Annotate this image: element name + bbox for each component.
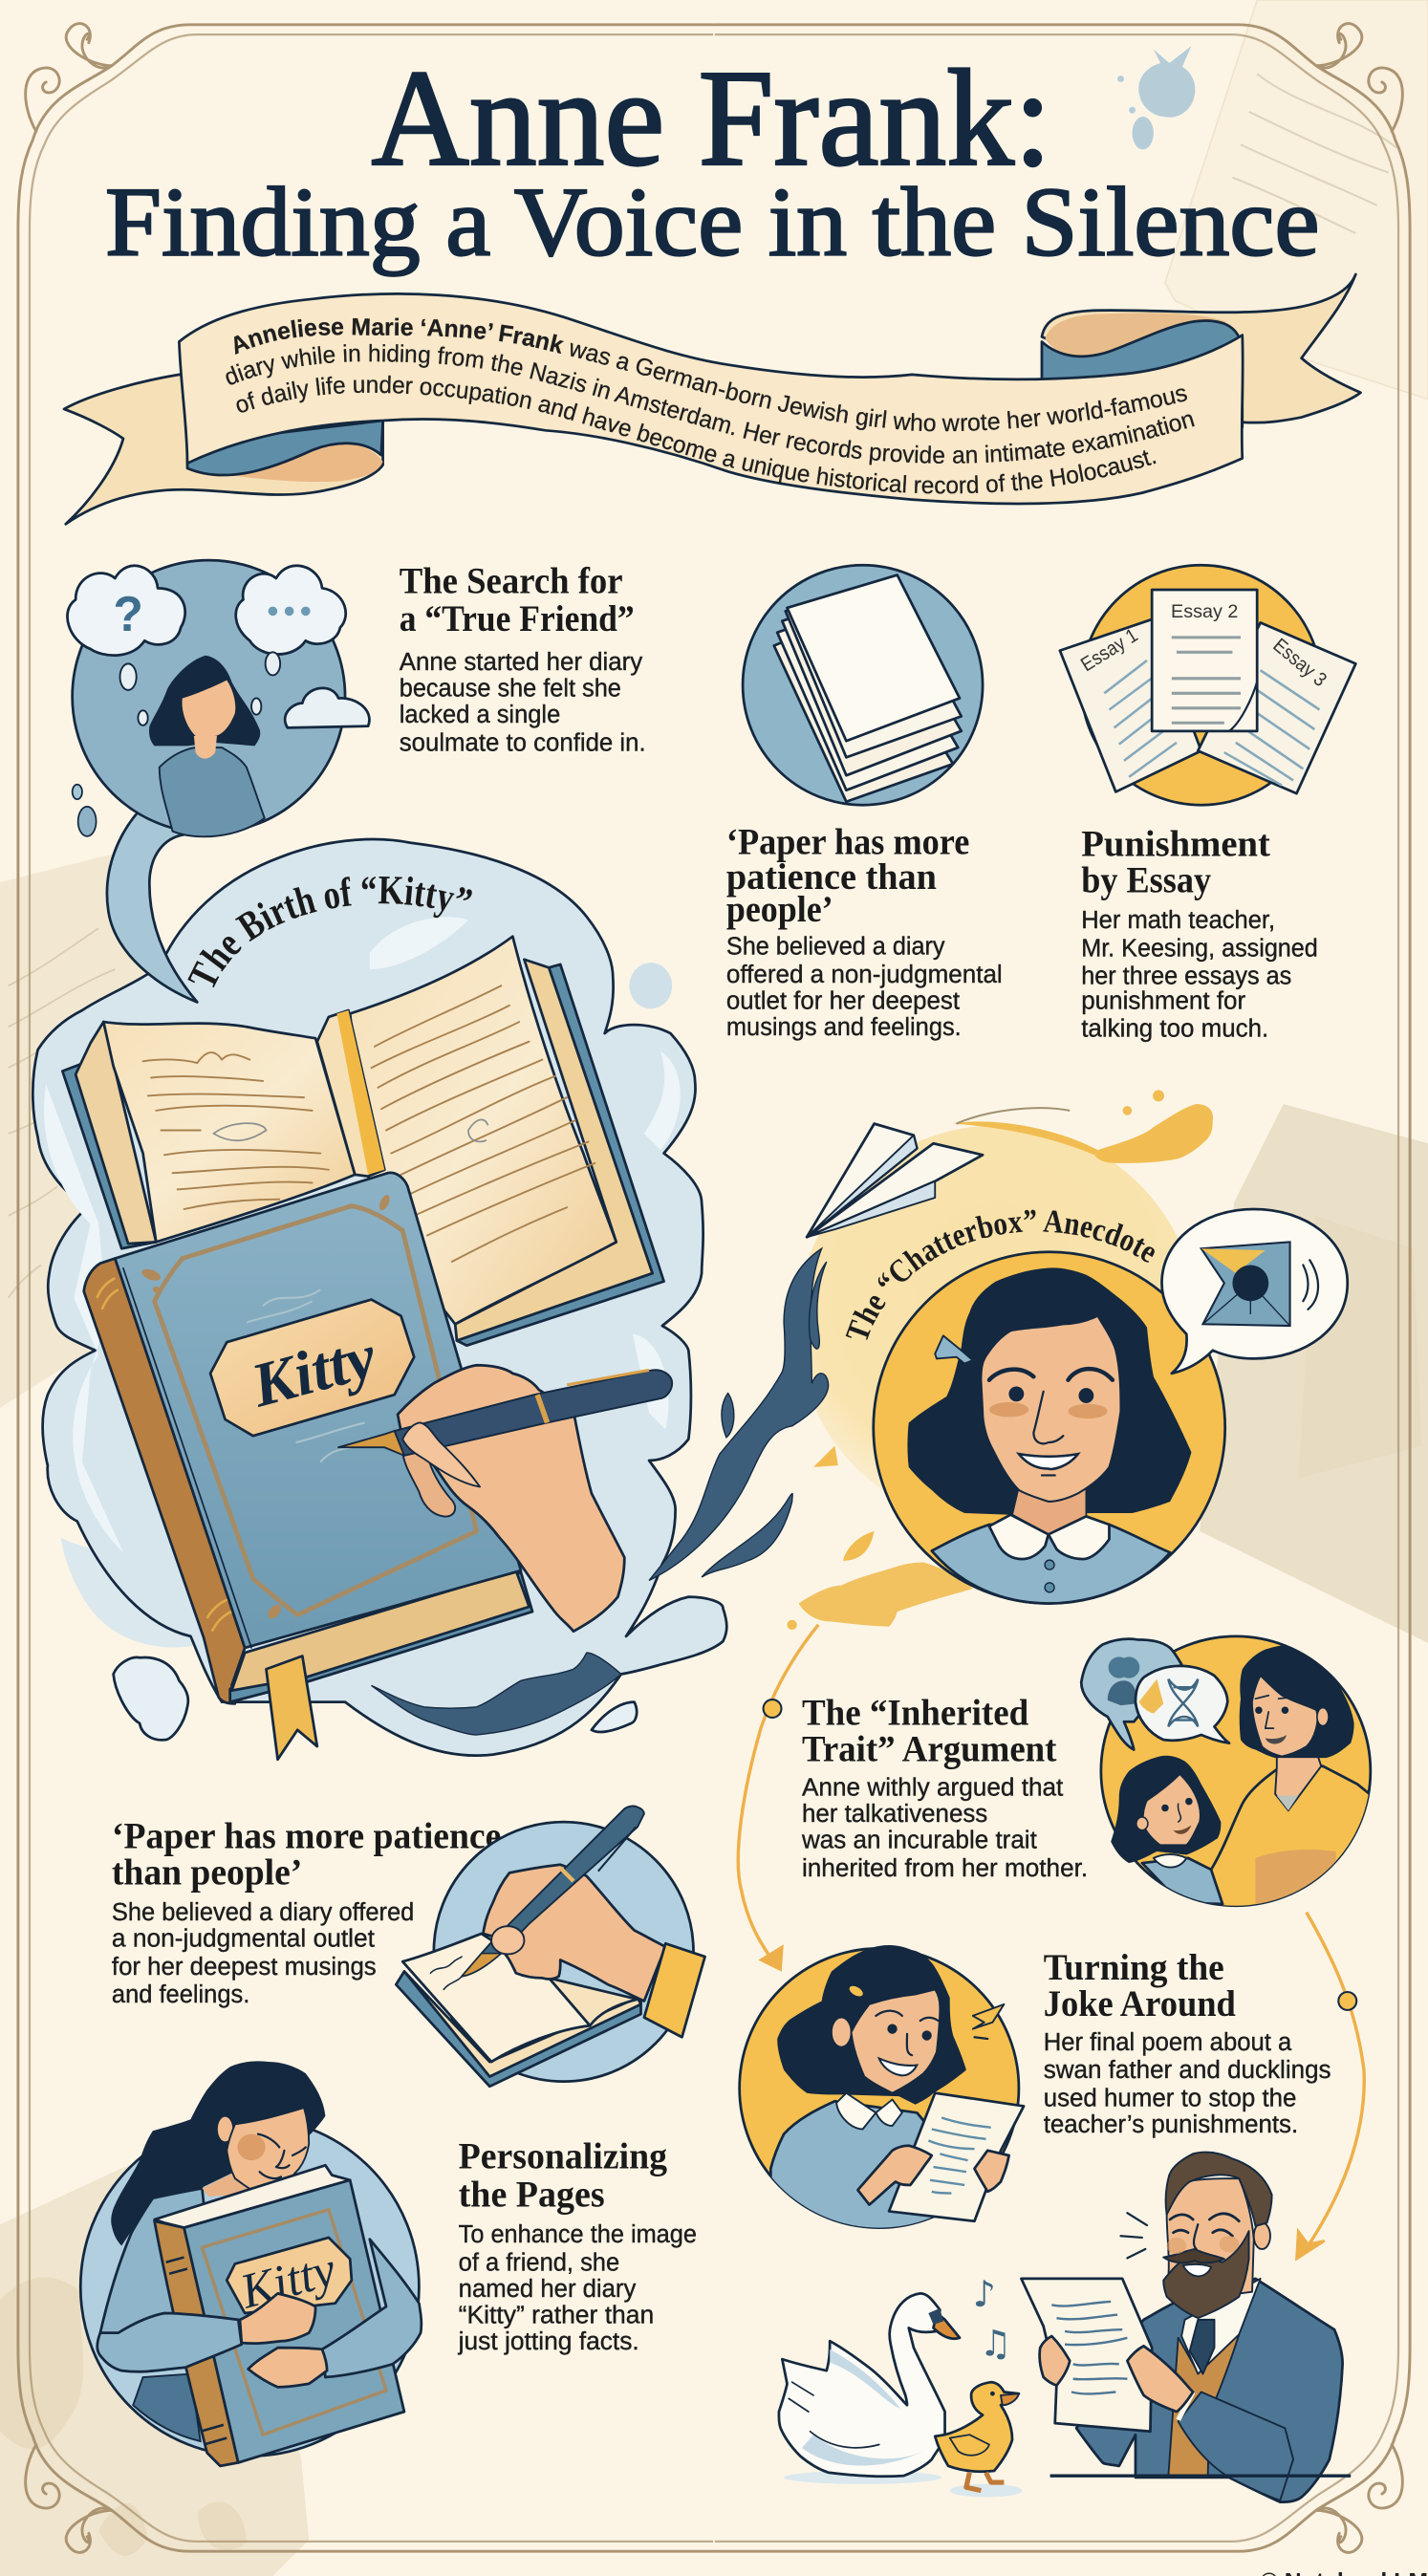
text: Paper has more patience (lower) [112,1815,501,2008]
text: Personalizing the Pages: Personalizing [459,2135,667,2177]
illustration: girl hugging diary [80,2061,422,2466]
vest [1168,2334,1239,2476]
hair bow [935,1335,973,1364]
banner ribbon [63,273,1362,526]
text: Personalizing the Pages [458,2135,697,2355]
illustration: girl reading poem [740,1945,1024,2235]
ear [1254,2222,1270,2249]
ribbon text: Anneliese Marie ‘Anne’ Frank was a German-born Jewish girl who wrote her world-famous [234,317,1187,432]
lower body [133,2374,201,2441]
text: Paper has more patience (lower): for her deepest musings [112,1954,377,1981]
pen [462,1806,644,1977]
gold splash: top [953,1104,1213,1163]
paper: world map [0,2165,309,2576]
illustration: hand writing in diary [396,1806,705,2087]
face [981,1316,1121,1502]
big cloud behind the diaries [32,839,726,1756]
text: Inherited Trait: her talkativeness [802,1801,987,1828]
mother sweater [1211,1766,1374,1914]
tie [1190,2320,1215,2374]
small cloud [285,688,369,727]
pale gold glow [797,1125,1198,1526]
text: The Birth of Kitty: The Birth of “Kitty” [187,876,472,988]
right arm [322,2240,422,2377]
collar [989,1515,1049,1559]
back cover left [62,1063,156,1248]
shirt [1181,2279,1261,2374]
text: Inherited Trait [801,1692,1088,1882]
moustache [1163,2249,1224,2262]
gold splash: bottom [799,1563,973,1627]
speech bubble with origami [1161,1209,1348,1374]
ribbon text: diary while in hiding from the Nazis in Amsterdam. Her records provide an intimate examination [226,344,1195,465]
essay 1 [1060,619,1201,791]
text: Paper has more patience (top): people’ [726,888,833,930]
blue back cover edge [230,1572,532,1702]
paper: top right [1165,0,1428,400]
text: The Chatterbox Anecdote: The “Chatterbox” Anecdote [845,1210,1155,1340]
collar [836,2093,876,2130]
essay 3: Essay 3 [1268,634,1331,691]
ear [832,2018,852,2047]
left page [103,1022,355,1242]
face [227,2108,309,2192]
thought cloud: question [67,566,185,656]
arm [1179,2392,1293,2500]
text: Inherited Trait: inherited from her mother. [802,1855,1088,1882]
thumb [491,1926,524,1954]
fog lobes lower left [61,1538,204,1648]
pen [338,1370,672,1456]
base line [1050,2475,1351,2477]
hair [907,1267,1191,1515]
ground shadows [784,2471,941,2484]
neck [1275,1751,1321,1810]
duckling legs [966,2473,1004,2491]
daughter hair [1111,1756,1221,1863]
text: Paper has more patience (top): musings and feelings. [726,1014,962,1041]
duckling [935,2382,1019,2472]
hand with fountain pen [338,1365,672,1632]
cover frame [155,1206,477,1615]
text: Punishment by Essay: by Essay [1081,858,1211,900]
text: The Search for a True Friend: because she felt she [400,676,621,703]
pages [231,1570,530,1691]
text: Paper has more patience (top): ‘Paper has more [726,821,969,863]
left hand [857,2146,932,2205]
ribbon left fold [187,421,383,475]
illustration: mother and daughter [1081,1636,1374,1914]
text: The Search for a True Friend: The Search for [400,559,623,601]
small open book [396,1971,640,2087]
text: Turning the Joke Around: swan father and ducklings [1044,2057,1331,2084]
swan [779,2293,945,2477]
ribbon left tail [64,375,383,524]
sleeve [644,1943,705,2037]
gold droplets [788,1090,1164,1630]
paper: right [1200,1104,1428,1643]
text: Personalizing the Pages: To enhance the image [459,2221,697,2248]
thought cloud: dots [236,566,346,655]
text: Paper has more patience (top): patience than [726,855,937,898]
text: The Search for a True Friend [400,559,646,756]
blush [989,1402,1028,1417]
text: The Search for a True Friend: soulmate to confide in. [400,729,646,756]
illustration: lonely girl with thought clouds [67,560,369,1002]
left hand [1040,2336,1070,2386]
text: Inherited Trait: The “Inherited [802,1692,1028,1734]
hair [1166,2153,1272,2226]
curled fingers [402,1447,455,1517]
icon: paper stack [743,565,983,805]
handwriting lines [143,1052,329,1209]
text: The Search for a True Friend: a “True Friend” [400,597,635,639]
text: Turning the Joke Around: Turning the [1044,1946,1224,1988]
ribbon left fold shade [227,444,383,482]
arrow: Inherited Trait to teacher [1296,1913,1364,2259]
nose and mouth [1033,1392,1063,1443]
text: Personalizing the Pages: named her diary [459,2276,636,2303]
hair [149,656,260,746]
text: Inherited Trait: Trait” Argument [802,1728,1056,1769]
text: Paper has more patience (top): outlet for her deepest [726,987,960,1014]
illustration: lonely girl with thought clouds: ? [113,586,143,641]
text: Inherited Trait: Anne withly argued that [802,1775,1063,1802]
daughter face [1143,1774,1201,1845]
centre band [317,1010,384,1177]
ear [217,2116,233,2142]
portrait: Anne [874,1252,1225,1604]
ribbon main body [179,293,1243,504]
book [155,2165,404,2466]
open book [62,937,664,1346]
text: Punishment by Essay: her three essays as [1081,963,1291,990]
hand lower [249,2348,327,2387]
text: Paper has more patience (lower): than people’ [112,1851,302,1893]
text: Punishment by Essay [1081,822,1318,1043]
neck [1012,1482,1086,1534]
ink stream [372,1248,829,1735]
speech bubble: silhouettes [1081,1639,1181,1749]
name plate: Kitty [244,1322,384,1421]
brows [989,1369,1113,1380]
right page [350,937,617,1324]
text: Personalizing the Pages: of a friend, she [459,2249,619,2276]
music notes: ♪ [973,2273,996,2315]
ribbon right fold shade [1045,313,1227,357]
text: Paper has more patience (lower): She believed a diary offered [112,1899,414,1926]
daughter dress [1142,1858,1222,1904]
ribbon right fold [1042,320,1243,427]
illustration: laughing teacher [1021,2153,1351,2502]
essay 3 [1198,622,1355,793]
essay 2 [1152,590,1257,731]
right hand [974,2151,1009,2192]
dress [768,2099,931,2228]
spine [84,1259,245,1703]
text: Punishment by Essay: Mr. Keesing, assigned [1081,935,1318,962]
text: Turning the Joke Around: teacher’s punishments. [1044,2111,1298,2138]
motion arc [957,1108,1070,1124]
gold ribbon [336,1010,384,1175]
paper: left [0,853,197,1408]
title: Anne Frank: [372,42,1051,195]
back cover right [457,964,664,1346]
hair [111,2061,325,2246]
closed diary: Kitty [84,1173,532,1760]
paper airplane [807,1124,983,1237]
text: Punishment by Essay: punishment for [1081,987,1246,1014]
ribbon right tail [1042,274,1361,422]
spark [973,2004,1004,2029]
bookmark [267,1656,317,1760]
tail [107,789,197,1002]
hand [483,1865,665,2001]
essay 1: Essay 1 [1077,624,1141,676]
title [105,42,1320,276]
text: Personalizing the Pages: the Pages [459,2173,605,2215]
mother face [1252,1676,1317,1756]
text: Punishment by Essay: Punishment [1081,822,1270,864]
text: Punishment by Essay: Her math teacher, [1081,907,1275,934]
text: Paper has more patience (top) [726,821,1003,1041]
mother hair [1240,1644,1354,1758]
text: Turning the Joke Around [1044,1946,1331,2138]
sweater body [100,2188,213,2357]
poem sheet [1021,2279,1152,2432]
left page stack [76,1022,156,1244]
body [160,747,265,836]
text: Paper has more patience (lower): and feelings. [112,1981,249,2008]
book: Kitty [234,2242,341,2320]
essay 2: Essay 2 [1171,601,1238,622]
eyes and brows [1170,2214,1239,2236]
text: Paper has more patience (top): offered a non-judgmental [726,962,1003,988]
laughter ticks [1121,2213,1147,2258]
text: Personalizing the Pages: “Kitty” rather than [459,2302,654,2328]
suit [1076,2279,1343,2502]
text: Personalizing the Pages: just jotting facts. [458,2328,639,2355]
beard [1163,2231,1249,2318]
mouth [1183,2264,1211,2276]
illustration: swan and duckling [779,2273,1022,2497]
left arm [97,2313,242,2371]
hair [777,1945,966,2105]
name plate [210,1300,414,1436]
small cloud [114,1657,188,1740]
text: Paper has more patience (lower): ‘Paper has more patience [112,1815,501,1857]
text: Paper has more patience (lower): a non-judgmental outlet [112,1926,375,1953]
face [183,681,235,736]
right hand [1127,2346,1193,2412]
text: The Search for a True Friend: Anne started her diary [400,649,642,676]
hand [398,1365,624,1632]
right page stack [455,960,653,1340]
text: Turning the Joke Around: used humer to stop the [1044,2085,1296,2111]
illustration: swan and duckling: ♫ [980,2323,1012,2365]
eyes [1008,1386,1024,1401]
text: Paper has more patience (top): She believed a diary [726,934,945,961]
text: Punishment by Essay: talking too much. [1081,1016,1268,1043]
speech bubble: DNA [1136,1666,1229,1743]
face [1167,2178,1254,2300]
thumb [402,1422,480,1486]
ribbon text: of daily life under occupation and have become a unique historical record of the Holocaust. [236,375,1157,494]
dress [932,1525,1170,1604]
hand upper [240,2293,315,2344]
poem paper [889,2093,1024,2221]
text: Inherited Trait: was an incurable trait [801,1828,1037,1854]
title: Finding a Voice in the Silence [105,167,1320,276]
text: Turning the Joke Around: Joke Around [1044,1982,1236,2024]
text: Turning the Joke Around: Her final poem about a [1044,2029,1292,2056]
icon: three essays [1060,565,1355,805]
arrow: Chatterbox to Turning the Joke [738,1625,818,1970]
front cover [115,1173,521,1648]
face [852,1989,940,2093]
text: The Search for a True Friend: lacked a single [400,702,560,728]
neck [202,2172,258,2197]
ink splatter [1117,46,1195,149]
